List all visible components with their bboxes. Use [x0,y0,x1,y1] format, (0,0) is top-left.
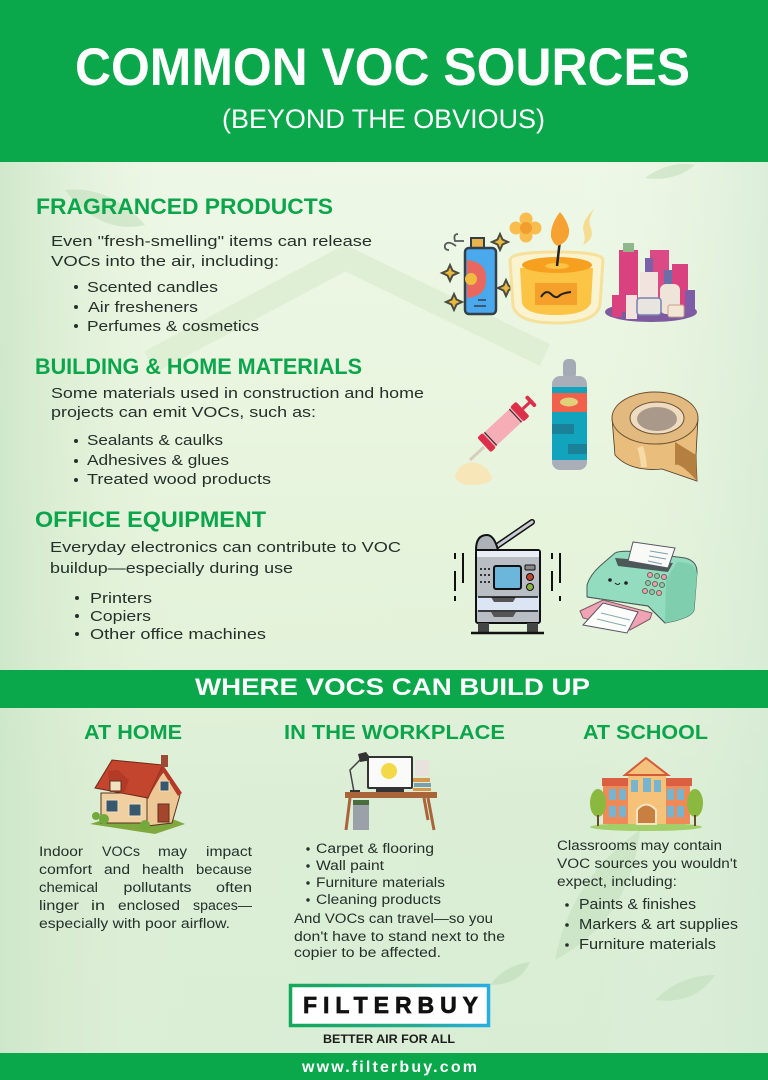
heading: at school: AT SCHOOL [583,722,708,744]
icon: tape roll [612,392,698,481]
paragraph: school: expect, including: [557,874,677,889]
list: school: Furniture materials [579,937,716,953]
section: building and home materials [35,354,424,488]
paragraph: at home: pollutants [124,880,192,895]
list: school: Markers & art supplies [579,917,738,933]
icon: desk [345,752,437,830]
paragraph: workplace [294,911,505,960]
heading: fragranced products: FRAGRANCED PRODUCTS [36,194,333,219]
intro text: building materials [51,385,424,421]
list: workplace [306,841,445,907]
header banner [0,0,768,162]
list: office equipment: Printers [90,590,152,607]
list: office equipment: Other office machines [90,626,266,643]
column: at home [39,722,253,931]
intro text: fragranced products [51,233,372,270]
paragraph: at home: may [158,844,187,859]
list: school: Paints & finishes [579,897,696,913]
paragraph: school [557,838,737,889]
title: COMMON VOC SOURCES [75,38,690,97]
list: building materials [74,432,271,488]
icon: caulk gun [455,393,539,485]
section: office equipment [35,507,401,643]
paragraph: at home: chemical [39,880,98,895]
list: workplace: Cleaning products [316,892,441,907]
logo: Filterbuy: BETTER AIR FOR ALL [323,1034,455,1046]
footer bar [0,1053,768,1080]
section: fragranced products [36,194,372,335]
intro text: office equipment: buildup—especially during use [50,560,293,577]
paragraph: at home: linger [39,898,80,913]
paragraph: at home: especially with poor airflow. [39,916,230,931]
logo: Filterbuy: FILTERBUY [303,992,478,1018]
column: at school [557,722,738,953]
paragraph: at home: because [196,862,252,877]
list: workplace: Carpet & flooring [316,841,434,856]
list: school [565,897,738,953]
list: office equipment: Copiers [90,608,151,625]
list: fragranced products: Perfumes & cosmetics [87,318,259,335]
list: building materials: Treated wood products [87,471,271,488]
icon: air freshener spray [442,234,512,314]
heading: building materials: BUILDING & HOME MATERIALS [35,354,362,379]
list: fragranced products: Scented candles [87,279,218,296]
list: fragranced products [74,279,259,335]
heading: office equipment: OFFICE EQUIPMENT [35,507,267,532]
paragraph: at home [39,844,253,931]
paragraph: at home: comfort [39,862,92,877]
paragraph: at home: and [104,862,130,877]
paragraph: at home: impact [206,844,252,859]
paragraph: school: VOC sources you wouldn't [557,856,737,871]
icon: copier [455,522,560,633]
icon: scented candle [510,208,603,323]
list: office equipment [75,590,266,643]
icon: fax printer [580,542,697,633]
icon: house [90,755,185,834]
list: building materials: Sealants & caulks [87,432,223,449]
paragraph: workplace: don't have to stand next to the [294,929,505,944]
intro text: fragranced products: VOCs into the air, including: [51,253,279,270]
band: where VOCs can build up: WHERE VOCS CAN BUILD UP [195,674,590,701]
paragraph: at home: spaces— [193,898,253,913]
list: building materials: Adhesives & glues [87,452,229,469]
footer bar: www.filterbuy.com [301,1059,477,1076]
logo: Filterbuy [290,986,488,1046]
band: where VOCs can build up [0,670,768,708]
intro text: office equipment: Everyday electronics can contribute to VOC [50,539,401,556]
icon: school [590,758,703,831]
column: in the workplace [284,722,505,960]
paragraph: at home: enclosed [118,898,180,913]
intro text: fragranced products: Even "fresh-smelling" items can release [51,233,372,250]
list: workplace: Wall paint [316,858,384,873]
intro text: building materials: projects can emit VOCs, such as: [51,404,316,421]
subtitle: (BEYOND THE OBVIOUS) [222,104,545,134]
paragraph: workplace: And VOCs can travel—so you [294,911,493,926]
intro text: office equipment [50,539,401,577]
paragraph: at home: VOCs [102,844,140,859]
paragraph: at home: Indoor [39,844,84,859]
icon: adhesive bottle [552,359,587,470]
paragraph: at home: health [142,862,184,877]
paragraph: at home: often [216,880,252,895]
list: fragranced products: Air fresheners [88,299,198,316]
paragraph: school: Classrooms may contain [557,838,722,853]
heading: at home: AT HOME [84,722,182,744]
paragraph: workplace: copier to be affected. [294,945,441,960]
icon: cosmetics tray [605,243,697,322]
paragraph: at home: in [91,898,105,913]
list: workplace: Furniture materials [316,875,445,890]
intro text: building materials: Some materials used in construction and home [51,385,424,402]
heading: in the workplace: IN THE WORKPLACE [284,722,505,744]
